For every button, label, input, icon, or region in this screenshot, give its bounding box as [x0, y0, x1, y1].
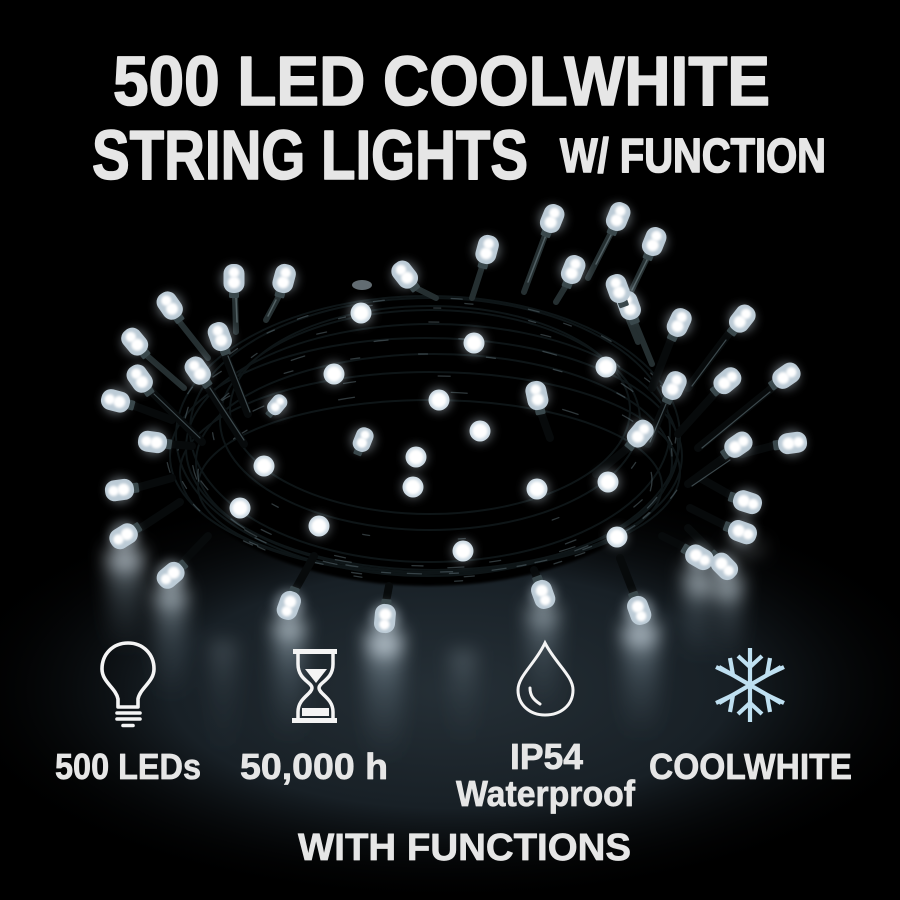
coil of dark green wire: [166, 294, 690, 586]
floor reflections of the lights: [108, 548, 742, 763]
label: 500 LEDs: 500 LEDs: [55, 746, 201, 787]
icon: light bulb: [102, 643, 154, 726]
round LED dots on the coil: [230, 280, 628, 562]
wire stems of the side and lower LEDs: [132, 332, 776, 602]
title line 1: 500 LED COOLWHITE: [113, 42, 770, 120]
label: COOLWHITE: COOLWHITE: [649, 746, 852, 787]
icon: hourglass: [292, 652, 337, 720]
label: WITH FUNCTIONS: WITH FUNCTIONS: [298, 827, 631, 869]
title suffix: W/ FUNCTION: [560, 130, 826, 183]
glow around the LEDs: [103, 204, 805, 633]
LED bulbs with stems: [99, 199, 808, 634]
label: 50,000 h: 50,000 h: [240, 746, 388, 787]
label: Waterproof: Waterproof: [456, 773, 636, 814]
title line 2: STRING LIGHTS: [92, 116, 528, 194]
icon: snowflake: [716, 648, 784, 722]
wire stems of the upper LEDs: [145, 231, 652, 388]
label: IP54: IP54: [510, 736, 583, 777]
floor glow background: [0, 475, 900, 900]
icon: water drop: [518, 643, 573, 715]
bright floor spots under the LEDs: [109, 542, 765, 655]
